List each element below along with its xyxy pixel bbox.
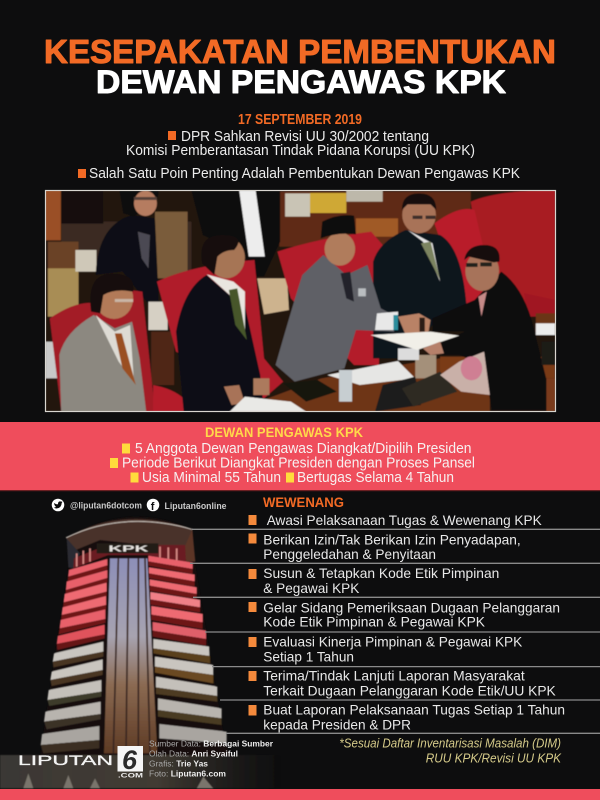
item 1: Awasi Pelaksanaan Tugas & Wewenang KPK [267,512,542,528]
item 2 line 1: Berikan Izin/Tak Berikan Izin Penyadapan, [263,531,521,547]
icon: twitter [52,499,64,511]
social handles [52,499,227,513]
title line 1: KESEPAKATAN PEMBENTUKAN [44,33,556,70]
woman [96,215,159,305]
item 3 bullet [248,569,256,579]
item 6 bullet [248,671,256,681]
item 5 line 1: Evaluasi Kinerja Pimpinan & Pegawai KPK [263,634,523,650]
left white bands [41,642,103,753]
footnote [339,737,562,766]
credit line 2: Olah Data: Anri Syaiful [149,749,238,759]
title line 2: DEWAN PENGAWAS KPK [96,64,506,100]
credits [149,739,274,778]
bullet [110,458,118,468]
item 7 line 1: Buat Laporan Pelaksanaan Tugas Setiap 1 Tahun [263,702,565,718]
panel: dewan pengawas [0,422,600,490]
panel line 3b: Bertugas Selama 4 Tahun [297,470,454,486]
item 7 bullet [248,705,256,716]
peci cap [321,215,356,238]
footer band [0,789,600,800]
item 4 bullet [248,602,256,612]
intro line 1: DPR Sahkan Revisi UU 30/2002 tentang [181,129,429,145]
logo wordmark: LIPUTAN [18,752,113,768]
logo: liputan6 [18,745,143,780]
item 3 line 1: Susun & Tetapkan Kode Etik Pimpinan [263,565,499,581]
kpk sign [97,543,158,553]
left red bands [57,559,107,650]
item 1 bullet [248,515,256,525]
item 5 bullet [248,637,256,647]
cloth on table [257,278,289,314]
facebook handle: Liputan6online [164,501,226,511]
credit line 1: Sumber Data: Berbagai Sumber [149,739,274,749]
footnote line 2: RUU KPK/Revisi UU KPK [426,752,562,766]
right red chairs [471,190,555,308]
logo box [118,746,143,772]
building illustration [0,517,287,788]
item 6 line 1: Terima/Tindak Lanjuti Laporan Masyarakat [263,667,525,683]
roof [66,519,192,552]
divider lines [190,529,600,733]
panel line 1: 5 Anggota Dewan Pengawas Diangkat/Dipilih Presiden [135,441,472,457]
logo com: .COM [118,772,143,780]
item 4 line 2: Kode Etik Pimpinan & Pegawai KPK [263,614,486,630]
panel heading: DEWAN PENGAWAS KPK [205,424,363,440]
date: 17 SEPTEMBER 2019 [238,112,362,128]
fourth man [373,230,467,358]
wewenang heading: WEWENANG [263,495,344,510]
icon: facebook: f [151,501,155,513]
right man [432,272,551,410]
desk [245,358,490,412]
bullet [122,444,130,454]
title [44,33,556,100]
left man [59,315,146,412]
item 6 line 2: Terkait Dugaan Pelanggaran Kode Etik/UU KPK [263,682,556,698]
intro line 3: Salah Satu Poin Penting Adalah Pembentukan Dewan Pengawas KPK [89,166,520,182]
twitter handle: @liputan6dotcom [70,500,142,510]
chair left [50,290,155,412]
right red bands [148,556,206,646]
central column [104,558,157,753]
item 2 line 2: Penggeledahan & Penyitaan [263,546,436,562]
item 5 line 2: Setiap 1 Tahun [263,649,354,665]
item 7 line 2: kepada Presiden & DPR [263,716,411,732]
roof slats [73,545,186,568]
standing man top [191,190,280,277]
intro line 2: Komisi Pemberantasan Tindak Pidana Korupsi (UU KPK) [126,143,475,159]
right white bands [153,639,227,743]
icon: facebook [147,499,159,513]
item 2 bullet [248,534,256,544]
photo: parliament handshake [45,190,556,412]
item 4 line 1: Gelar Sidang Pemeriksaan Dugaan Pelanggaran [263,600,560,616]
chair third [277,232,383,365]
intro text [78,129,520,182]
papers [370,332,459,350]
credit line 3: Grafis: Trie Yas [149,759,208,769]
tower body [40,517,230,757]
building illustration: KPK [108,543,150,553]
second man [176,275,264,412]
bullet [130,472,138,482]
panel line 3a: Usia Minimal 55 Tahun [142,470,281,486]
ground posts [23,773,213,788]
chair second [157,260,283,398]
item 3 line 2: & Pegawai KPK [263,580,360,596]
logo six: 6 [122,745,138,775]
flowers [440,352,490,395]
ground [0,755,287,788]
credit line 4: Foto: Liputan6.com [149,768,226,778]
panel: wewenang list [248,512,565,732]
bullet [78,169,86,178]
panel line 2: Periode Berikut Diangkat Presiden dengan Proses Pansel [122,456,475,472]
bullet [168,131,176,140]
footnote line 1: *Sesuai Daftar Inventarisasi Masalah (DIM) [339,737,561,751]
bullet [286,472,294,482]
third man [276,255,394,382]
